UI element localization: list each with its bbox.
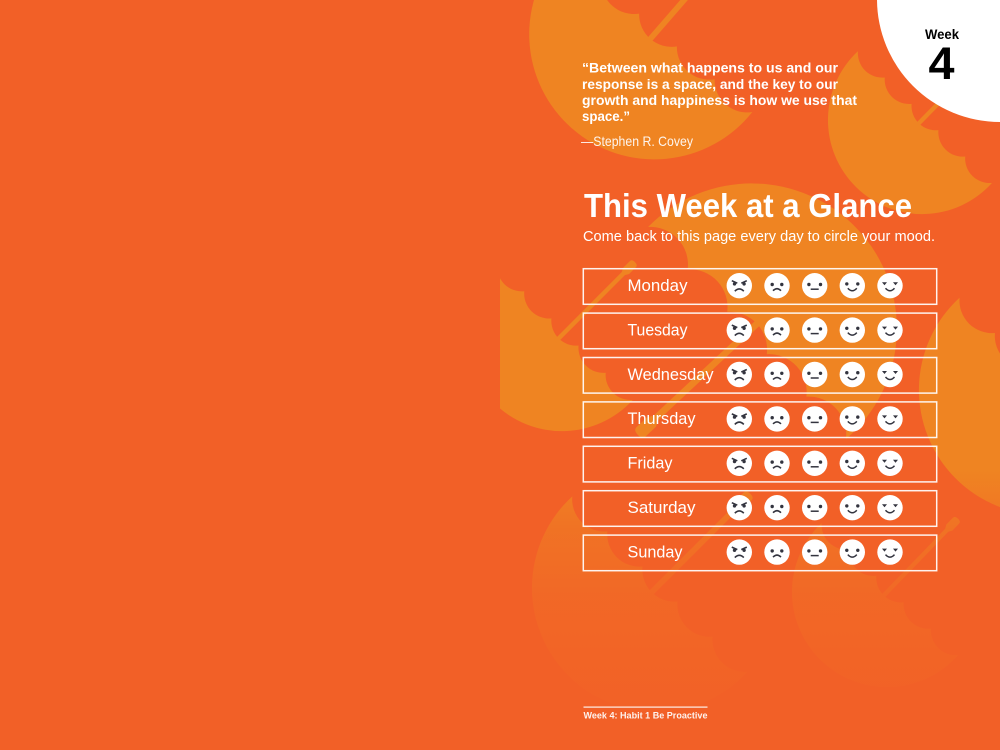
day label: Thursday xyxy=(628,409,696,428)
quote xyxy=(582,60,857,124)
fade over lower umbrellas xyxy=(500,470,1000,750)
mood faces xyxy=(727,539,903,565)
day label: Sunday xyxy=(628,542,683,561)
mood faces xyxy=(727,362,903,387)
week number: 4 xyxy=(928,38,954,89)
day label: Tuesday xyxy=(628,320,688,339)
day label: Saturday xyxy=(628,498,696,517)
title: This Week at a Glance xyxy=(584,187,912,224)
row: Wednesday xyxy=(583,358,937,393)
footer xyxy=(584,706,708,722)
icon: umbrella bottom right xyxy=(792,517,960,596)
mood faces xyxy=(727,273,903,298)
week label: Week xyxy=(925,27,959,42)
icon: umbrella top right xyxy=(828,51,992,214)
row: Monday xyxy=(583,269,937,304)
quote attribution: —Stephen R. Covey xyxy=(581,133,693,149)
row: Thursday xyxy=(583,402,937,438)
week badge xyxy=(877,0,1000,122)
quote: “Between what happens to us and our xyxy=(582,60,839,76)
day label: Wednesday xyxy=(628,365,714,384)
row: Saturday xyxy=(583,491,937,526)
icon: umbrella centre xyxy=(635,184,896,439)
mood faces xyxy=(727,317,903,343)
footer text: Week 4: Habit 1 Be Proactive xyxy=(584,710,708,722)
icon: umbrella bottom left xyxy=(532,492,752,596)
quote: growth and happiness is how we use that xyxy=(582,92,857,108)
quote: space.” xyxy=(582,108,630,124)
day label: Monday xyxy=(628,276,688,295)
umbrella pattern xyxy=(500,0,1000,596)
subtitle: Come back to this page every day to circle your mood. xyxy=(583,229,935,245)
mood faces xyxy=(727,495,903,520)
day label: Friday xyxy=(628,454,673,473)
mood tracker xyxy=(583,269,937,571)
quote: response is a space, and the key to our xyxy=(582,76,839,92)
mood faces xyxy=(727,406,903,432)
mood faces xyxy=(727,451,903,476)
row: Tuesday xyxy=(583,313,937,349)
row: Friday xyxy=(583,446,937,482)
icon: umbrella left xyxy=(500,260,637,432)
icon: umbrella top centre xyxy=(529,0,752,160)
row: Sunday xyxy=(583,535,937,571)
icon: umbrella right xyxy=(919,298,1000,507)
